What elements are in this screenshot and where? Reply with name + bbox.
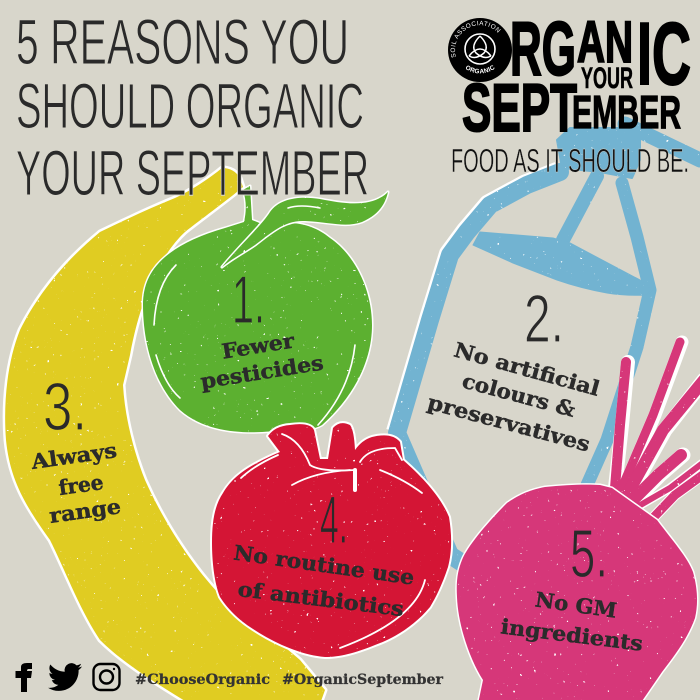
panel: apple, reason 1 [143, 186, 388, 432]
wordmark [462, 4, 691, 146]
label: fewer pesticides: pesticides [199, 351, 325, 394]
label: no artificial colours and preservatives: colours & [460, 369, 578, 422]
bottle drawing [397, 124, 700, 568]
panel: beetroot, reason 5 [457, 342, 700, 700]
beetroot body [457, 485, 697, 700]
label: no GM ingredients: No GM [534, 587, 618, 623]
label: no routine use of antibiotics: of antibiotics [237, 577, 405, 621]
number 2: 2. [524, 281, 564, 357]
wordmark: AN [577, 10, 633, 75]
icon: instagram [94, 664, 120, 690]
tomato shape [212, 423, 451, 657]
label: no routine use of antibiotics [232, 541, 416, 621]
bottle white edge [395, 170, 558, 432]
hashtags: #OrganicSeptember [282, 672, 444, 688]
label: always free range [29, 438, 122, 528]
panel: tomato, reason 4 [212, 423, 451, 657]
soil association badge: ORGANIC [466, 65, 494, 74]
label: fewer pesticides: Fewer [220, 328, 297, 364]
hashtags [135, 672, 444, 688]
apple highlight lines [154, 206, 355, 425]
wordmark: RG [510, 7, 576, 92]
wordmark: SEPT [462, 70, 577, 146]
label: no routine use of antibiotics: No routine use [232, 541, 416, 590]
label: always free range: Always [29, 438, 118, 474]
logo: Organic Your September [448, 4, 691, 146]
icon: facebook [16, 663, 32, 692]
number 1: 1. [232, 262, 265, 338]
tomato highlight lines [241, 434, 425, 648]
soil association badge: SOIL ASSOCIATION [450, 20, 501, 58]
label: no GM ingredients [499, 587, 644, 656]
label: no artificial colours and preservatives: No artificial [451, 338, 603, 401]
panel: tomato, reason 4: 4. [320, 482, 348, 558]
banana shape [5, 168, 325, 700]
footer: social icons and hashtags [16, 663, 444, 692]
label: no artificial colours and preservatives [425, 338, 603, 456]
title [16, 6, 369, 209]
label: no artificial colours and preservatives: preservatives [425, 390, 593, 456]
apple shape with stem and leaf [143, 186, 388, 432]
label: always free range: free [57, 470, 105, 500]
beetroot leaves outline [615, 342, 700, 518]
label: fewer pesticides [199, 328, 325, 394]
number 5: 5. [570, 516, 608, 592]
beetroot leaves fill [615, 342, 700, 518]
panel: bottle, reason 2 [395, 124, 700, 568]
number 3: 3. [43, 369, 87, 445]
icon: twitter [48, 663, 82, 691]
wordmark: YOUR [581, 62, 633, 95]
label: always free range: range [48, 494, 122, 528]
panel: banana, reason 3 [5, 168, 325, 700]
title: YOUR SEPTEMBER [16, 137, 369, 209]
title: SHOULD ORGANIC [16, 70, 364, 142]
title: 5 REASONS YOU [16, 6, 349, 78]
soil association badge [448, 18, 512, 82]
hashtags: #ChooseOrganic [135, 672, 270, 688]
label: no GM ingredients: ingredients [499, 614, 644, 656]
